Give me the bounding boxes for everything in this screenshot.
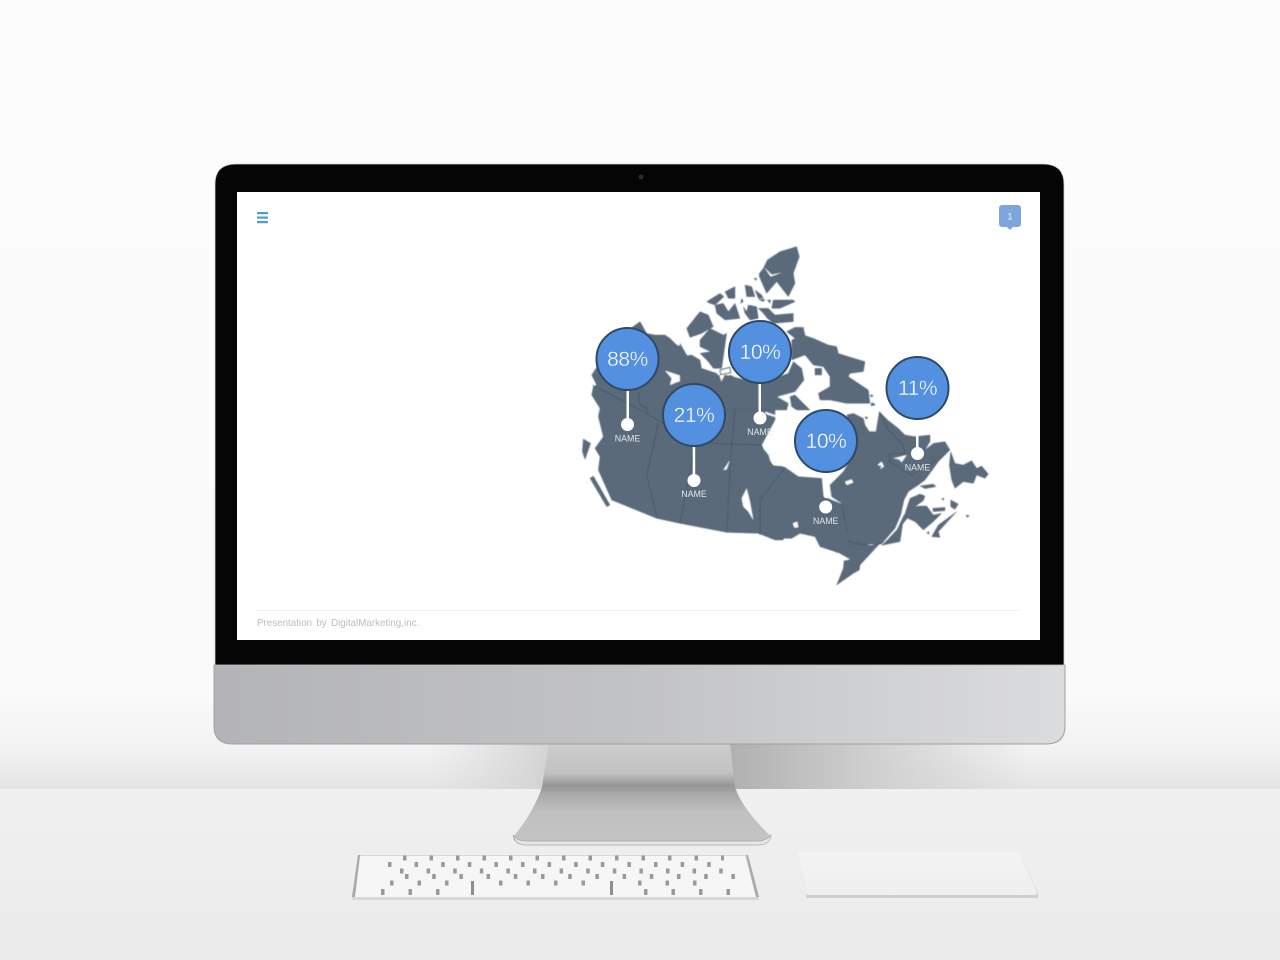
icon: notification badge <box>999 205 1021 230</box>
webcam <box>638 174 644 180</box>
Prince Edward Island <box>933 507 945 512</box>
pin: 88%: 88% <box>607 348 648 371</box>
western mainland <box>582 322 783 540</box>
pin: 10% south: NAME <box>813 516 839 526</box>
Bylot Island <box>787 327 805 338</box>
Melville Island <box>707 293 724 305</box>
Baffin Island <box>792 335 870 403</box>
New Brunswick south <box>882 515 910 545</box>
Prince Charles Island <box>815 368 822 375</box>
Manicouagan reservoir <box>893 455 907 462</box>
pin: 88% <box>596 328 658 444</box>
western borders <box>592 357 761 532</box>
north mainland <box>680 343 804 410</box>
pin: 21%: 21% <box>674 404 714 427</box>
Georgian Bay <box>829 552 850 561</box>
monitor bezel <box>215 164 1064 665</box>
Lake Winnipeg <box>742 488 753 520</box>
Banks Island <box>687 312 713 337</box>
Devon Island <box>758 308 793 323</box>
Anticosti <box>920 484 936 489</box>
small northern islands <box>870 395 875 406</box>
small Atlantic islands <box>927 498 969 534</box>
pin: 88%: NAME <box>615 434 640 444</box>
Lake Mistassini <box>877 462 884 469</box>
pin: 11%: NAME <box>905 462 930 472</box>
Hudson Bay islands <box>865 403 875 419</box>
pin: 10% north: 10% <box>740 341 780 364</box>
Ontario <box>760 445 880 585</box>
pin: 10% north <box>729 321 791 437</box>
monitor stand <box>513 743 771 845</box>
Victoria Island <box>700 328 727 368</box>
icon: notification badge: 1 <box>1007 212 1013 222</box>
icon: hamburger menu <box>257 212 268 223</box>
Abitibi lake <box>845 480 852 485</box>
screen <box>237 192 1040 640</box>
Chesterfield Inlet <box>765 412 775 417</box>
Cape Breton <box>951 500 958 509</box>
Gaspe and New Brunswick <box>904 494 942 530</box>
eastern borders <box>842 412 940 546</box>
channel island <box>720 367 731 375</box>
Arctic and central north <box>680 247 875 410</box>
Great Slave Lake <box>665 371 687 385</box>
pin: 21%: NAME <box>681 489 707 499</box>
Vancouver Island <box>590 476 610 507</box>
Haida Gwaii <box>582 439 591 459</box>
pin: 11% <box>886 357 948 472</box>
pin: 21% <box>663 384 725 499</box>
pin: 10% south: 10% <box>806 430 846 453</box>
trackpad <box>797 852 1038 898</box>
Axel Heiberg south piece <box>772 300 795 308</box>
monitor <box>214 164 1065 744</box>
Lake Athabasca <box>723 460 730 470</box>
map of Canada <box>582 247 988 585</box>
Lake Nipigon <box>793 522 798 528</box>
Quebec and Atlantic Canada <box>830 403 988 546</box>
small arctic islands <box>725 278 771 320</box>
Ellesmere Island <box>759 247 799 297</box>
pin: 10% north: NAME <box>747 427 773 437</box>
Newfoundland <box>949 452 988 488</box>
Quebec lake <box>845 479 853 485</box>
Nova Scotia <box>932 512 957 537</box>
Ellesmere inlet <box>764 267 782 277</box>
monitor chin <box>214 665 1065 744</box>
Manitoba Ontario border <box>760 467 785 535</box>
Bathurst group <box>715 303 740 320</box>
pin: 11%: 11% <box>898 377 937 400</box>
pin: 10% south <box>795 410 857 526</box>
keyboard <box>352 855 759 900</box>
footer: Presentation by DigitalMarketing,inc. <box>257 618 419 629</box>
Southampton Island <box>790 395 810 410</box>
